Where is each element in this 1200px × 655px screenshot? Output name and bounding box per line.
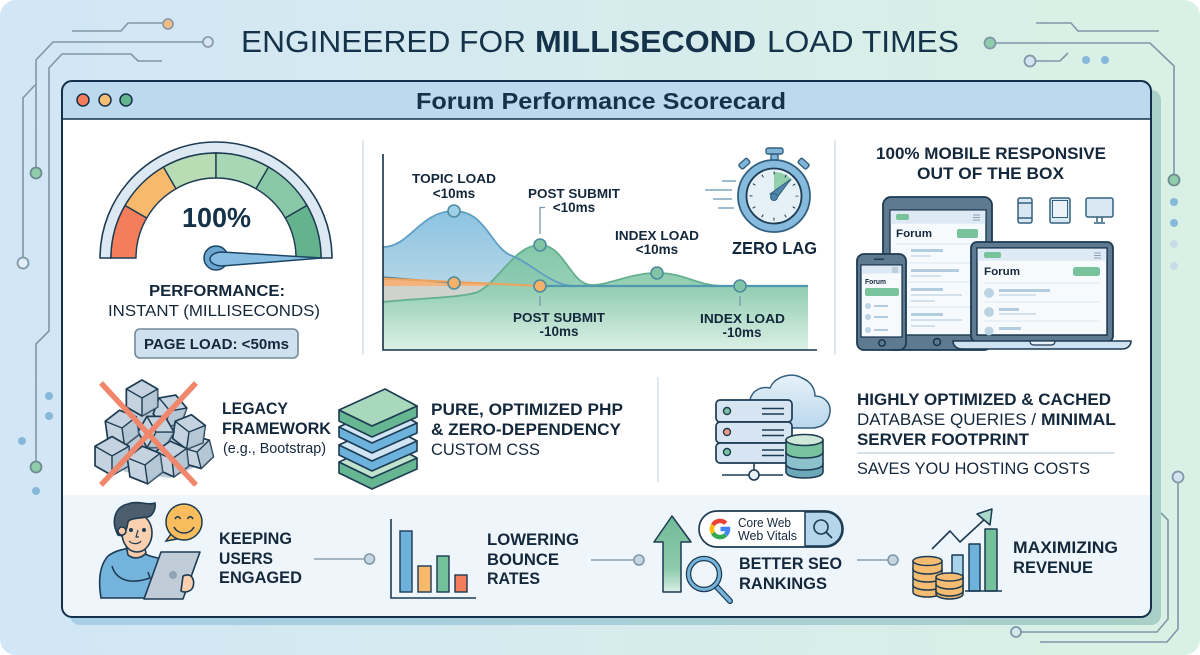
keeping users label: KEEPING <box>219 529 292 548</box>
chart axes <box>383 154 817 350</box>
panel: bottom benefits band <box>62 495 1151 617</box>
php label <box>431 400 623 459</box>
title: ENGINEERED FOR <box>241 24 526 59</box>
panel: scorecard window <box>62 81 1151 617</box>
icon: crossed out cube pile <box>95 380 215 486</box>
benefit: keeping users engaged <box>100 503 302 599</box>
gauge needle <box>204 246 322 270</box>
php label: PURE, OPTIMIZED PHP <box>431 400 623 419</box>
panel: performance gauge <box>100 142 332 358</box>
bounce label: LOWERING <box>487 530 579 549</box>
benefit: maximizing revenue <box>913 509 1118 599</box>
window traffic lights <box>77 94 132 106</box>
server label: HIGHLY OPTIMIZED & CACHED <box>857 390 1111 409</box>
server label <box>857 390 1116 478</box>
chart labels: TOPIC LOAD <box>412 171 496 186</box>
area chart <box>383 211 808 350</box>
icon: coins and growth chart <box>913 509 1002 599</box>
chart labels: -10ms <box>722 325 762 340</box>
seo label: RANKINGS <box>739 574 827 593</box>
gauge value: 100% <box>182 202 251 233</box>
icon: stopwatch <box>705 148 810 232</box>
icon: small device set <box>1018 198 1113 223</box>
revenue label <box>1013 538 1118 577</box>
icon: phone device <box>857 254 906 350</box>
seo label <box>739 554 842 593</box>
server label: SAVES YOU HOSTING COSTS <box>857 459 1090 478</box>
icon: server, cloud and database <box>716 375 830 480</box>
heading: 100% MOBILE RESPONSIVE <box>876 144 1106 163</box>
revenue label: MAXIMIZING <box>1013 538 1118 557</box>
bar chart <box>391 519 476 598</box>
chart labels: <10ms <box>636 242 678 257</box>
benefit: lowering bounce rates <box>391 519 579 598</box>
title: LOAD TIMES <box>767 24 959 59</box>
panel: load time chart <box>383 148 817 350</box>
keeping users label: USERS <box>219 549 273 568</box>
keeping users label: ENGAGED <box>219 568 302 587</box>
icon: tablet device <box>883 197 992 350</box>
bounce label: BOUNCE <box>487 550 559 569</box>
icon: smile bubble <box>166 504 202 541</box>
server label: DATABASE QUERIES / <box>857 410 1036 429</box>
circuit decoration: top left <box>18 19 213 495</box>
icon: laptop device: Forum <box>984 266 1020 278</box>
chart markers <box>448 205 746 292</box>
page load badge <box>135 329 298 358</box>
icon: person with tablet <box>100 503 200 599</box>
search pill <box>699 511 843 547</box>
panel: legacy framework <box>95 380 332 486</box>
window shadow <box>70 90 1161 625</box>
gauge caption: INSTANT (MILLISECONDS) <box>108 303 320 320</box>
chart labels: <10ms <box>433 186 475 201</box>
window header bar <box>62 81 1151 119</box>
legacy label: LEGACY <box>222 399 289 418</box>
bounce label <box>487 530 579 588</box>
legacy label <box>222 399 332 457</box>
connector arrow 2 <box>591 555 644 565</box>
server label: SERVER FOOTPRINT <box>857 430 1030 449</box>
chart labels: INDEX LOAD <box>615 228 699 243</box>
chart labels: POST SUBMIT <box>513 310 605 325</box>
chart labels: INDEX LOAD <box>700 311 785 326</box>
chart labels: POST SUBMIT <box>528 186 620 201</box>
chart labels <box>412 171 785 340</box>
panel: mobile responsive <box>857 144 1131 350</box>
window heading: Forum Performance Scorecard <box>416 88 786 114</box>
icon: laptop device <box>953 242 1131 349</box>
panel: database and server <box>716 375 1116 480</box>
icon: up arrow <box>654 516 691 592</box>
connector arrow 3 <box>857 555 898 565</box>
php label: & ZERO-DEPENDENCY <box>431 420 622 439</box>
title <box>241 24 959 59</box>
revenue label: REVENUE <box>1013 558 1093 577</box>
icon: layered stack <box>339 389 417 489</box>
gauge dial <box>100 142 332 258</box>
connector arrow 1 <box>314 554 374 564</box>
heading <box>876 144 1106 183</box>
icon: magnifying glass <box>688 558 730 601</box>
search pill: Web Vitals <box>738 529 797 543</box>
chart labels: -10ms <box>539 324 579 339</box>
bounce label: RATES <box>487 569 540 588</box>
circuit decoration: top right <box>984 23 1180 270</box>
seo label: BETTER SEO <box>739 554 842 573</box>
icon: phone device: Forum <box>865 277 886 286</box>
circuit decoration: bottom right <box>1011 472 1184 642</box>
legacy label: FRAMEWORK <box>222 419 332 438</box>
php label: CUSTOM CSS <box>431 440 540 459</box>
benefit: better seo rankings <box>654 511 843 601</box>
page load badge: PAGE LOAD: <50ms <box>144 336 289 353</box>
search pill: Core Web <box>738 516 791 530</box>
gauge caption <box>108 283 320 320</box>
title: MILLISECOND <box>535 24 756 59</box>
panel: optimized php <box>339 389 623 489</box>
keeping users label <box>219 529 302 587</box>
zero lag label: ZERO LAG <box>732 238 817 258</box>
heading: OUT OF THE BOX <box>917 164 1065 183</box>
gauge caption: PERFORMANCE: <box>149 283 285 300</box>
server label: MINIMAL <box>1041 410 1116 429</box>
icon: tablet device: Forum <box>896 228 932 240</box>
chart labels: <10ms <box>553 200 595 215</box>
legacy label: (e.g., Bootstrap) <box>223 441 326 457</box>
